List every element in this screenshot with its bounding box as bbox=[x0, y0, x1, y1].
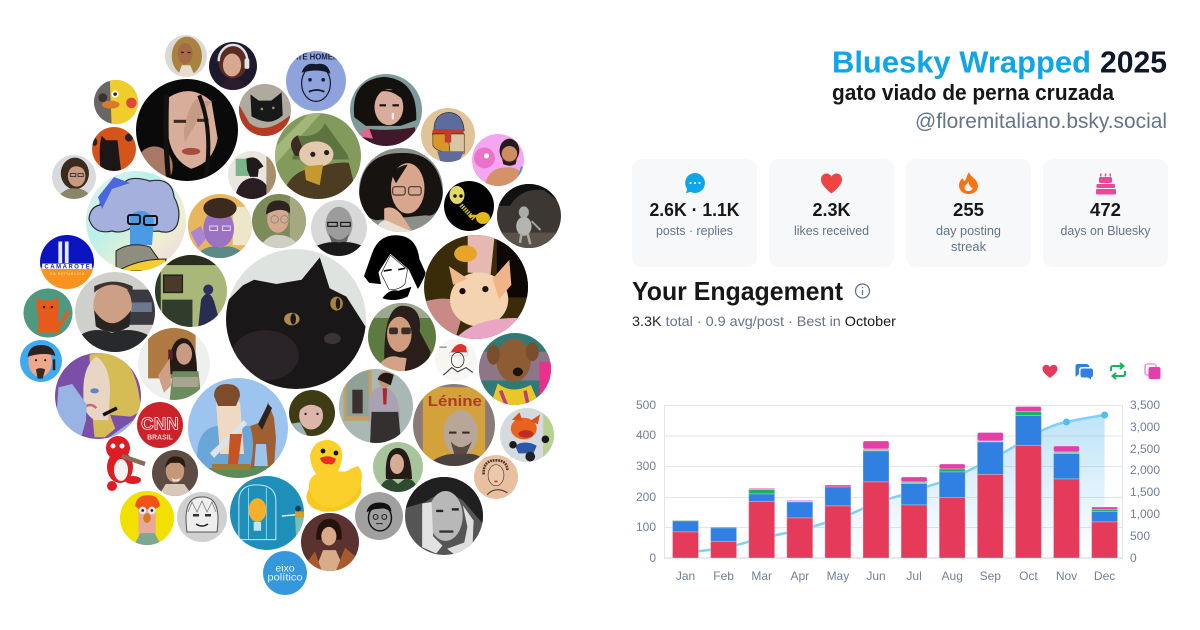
avatar: sketch on peach bbox=[474, 455, 518, 499]
stacked bars: monthly engagement bbox=[672, 406, 1118, 558]
y axis right labels bbox=[1130, 398, 1160, 565]
bar: Feb bbox=[711, 527, 737, 558]
avatar: red plush with bazooka bbox=[106, 436, 145, 491]
avatar: black cat on red blanket bbox=[239, 84, 291, 136]
avatar: grayscale man with hands on face bbox=[405, 477, 483, 555]
avatar: Lenin book cover bbox=[413, 384, 495, 466]
avatar: woman in sunglasses bbox=[368, 303, 436, 371]
avatar: man with purple light bbox=[188, 194, 252, 258]
y axis right labels: 1,500 bbox=[1130, 485, 1160, 499]
bar: May bbox=[825, 485, 851, 558]
avatar bubble cluster bbox=[20, 35, 561, 595]
avatar: woman with headphones bbox=[209, 42, 257, 90]
x axis month labels: Oct bbox=[1019, 569, 1038, 583]
stat card: posts and replies bbox=[632, 159, 757, 267]
icon: reposts arrows bbox=[1111, 363, 1125, 379]
avatar: smiling man in dark room bbox=[152, 450, 198, 496]
avatar: drawn man on periwinkle: ATE HOMEM bbox=[293, 52, 339, 61]
avatar: woman with 80s hair and cigarette bbox=[350, 74, 422, 146]
bar: Dec bbox=[1092, 507, 1118, 558]
title: 2025 bbox=[1100, 44, 1167, 80]
avatar: red cat on green bbox=[24, 288, 72, 338]
icon: birthday cake bbox=[1096, 174, 1116, 194]
y axis right labels: 3,500 bbox=[1130, 398, 1160, 412]
avatar: Lenin book cover: Lénine bbox=[428, 394, 482, 410]
avatar: silhouette with cap bbox=[228, 151, 276, 202]
chart legend bbox=[1042, 363, 1160, 380]
avatar: Eixo Politico logo bbox=[263, 551, 307, 595]
avatar: grey creature in dark room bbox=[497, 184, 561, 248]
x axis month labels: Feb bbox=[713, 569, 734, 583]
stat card: likes received: likes received bbox=[794, 224, 869, 238]
x axis month labels: Jul bbox=[906, 569, 922, 583]
avatar: manga character bbox=[360, 234, 426, 300]
stat card: posts and replies: posts · replies bbox=[656, 224, 733, 238]
x axis month labels: Jan bbox=[676, 569, 695, 583]
y axis right labels: 1,000 bbox=[1130, 507, 1160, 521]
x axis month labels: Sep bbox=[980, 569, 1001, 583]
avatar: blue cartoon with purple cloud hair bbox=[86, 171, 186, 271]
x axis month labels: Jun bbox=[866, 569, 886, 583]
stat card: days on Bluesky: 472 bbox=[1090, 199, 1121, 220]
x axis month labels: Mar bbox=[751, 569, 772, 583]
title: Bluesky Wrapped bbox=[832, 44, 1091, 80]
avatar: orange fluffy with black cat bbox=[92, 127, 136, 171]
icon: replies bubbles bbox=[1076, 364, 1093, 380]
avatar: cartoon man on light blue bbox=[20, 340, 62, 382]
bar: Jul bbox=[901, 477, 927, 558]
y axis right labels: 2,000 bbox=[1130, 463, 1160, 477]
combined bar and line chart bbox=[636, 398, 1160, 583]
cumulative line bbox=[686, 412, 1108, 553]
avatar: drawn man on periwinkle bbox=[286, 51, 346, 111]
avatar: CNN Brasil logo bbox=[137, 402, 183, 448]
avatar: yellow duck costume bbox=[94, 80, 138, 124]
avatar: classical painted woman bbox=[301, 513, 359, 571]
avatar: orange bandicoot plush bbox=[500, 408, 554, 462]
y axis right labels: 3,000 bbox=[1130, 420, 1160, 434]
avatar: selfie in green tank top bbox=[138, 328, 210, 400]
icon: quotes copy bbox=[1145, 364, 1160, 379]
icon: likes heart bbox=[1042, 365, 1058, 378]
avatar: CNN Brasil logo: CNN bbox=[141, 414, 179, 434]
handle: @floremitaliano.bsky.social bbox=[915, 110, 1167, 133]
x axis month labels bbox=[676, 569, 1115, 583]
avatar: cubist mask painting bbox=[421, 108, 475, 162]
icon: chat bubble bbox=[685, 173, 705, 193]
display name: gato viado de perna cruzada bbox=[832, 80, 1115, 105]
avatar: green hat character bbox=[275, 113, 361, 199]
avatar: yellow skeleton with trumpet bbox=[444, 181, 494, 231]
engagement summary: 3.3K total · 0.9 avg/post · Best in October bbox=[632, 313, 896, 329]
stat card: likes received: 2.3K bbox=[812, 199, 851, 220]
avatar: yellow rubber duck bbox=[302, 440, 366, 517]
y axis left labels: 500 bbox=[636, 398, 656, 412]
stat card: day posting streak: day posting bbox=[936, 224, 1001, 238]
x axis month labels: Apr bbox=[790, 569, 809, 583]
bar: Aug bbox=[939, 464, 965, 558]
icon: flame bbox=[959, 172, 978, 194]
avatar: Eixo Politico logo: eixo bbox=[275, 563, 295, 575]
avatar: cartoon man with bird on pink bbox=[472, 134, 525, 186]
avatar: Alice-style blonde illustration bbox=[55, 352, 141, 439]
avatar: woman with long black braids bbox=[136, 79, 238, 187]
avatar: lightbulb in birdcage bbox=[230, 476, 304, 550]
stat card: day posting streak: 255 bbox=[953, 199, 984, 220]
x axis month labels: Nov bbox=[1056, 569, 1077, 583]
avatar: Camarote da Republica logo bbox=[40, 235, 94, 289]
y axis right labels: 0 bbox=[1130, 551, 1137, 565]
avatar: doodle on grey bbox=[355, 492, 403, 540]
bar: Jun bbox=[863, 441, 889, 558]
stat card: day posting streak: streak bbox=[951, 240, 987, 254]
avatar: large black cat close-up bbox=[226, 249, 366, 389]
y axis left labels: 400 bbox=[636, 428, 656, 442]
stat card: day posting streak bbox=[906, 159, 1031, 267]
avatar: orange-haired puppet on yellow bbox=[120, 491, 174, 545]
bar: Nov bbox=[1054, 446, 1080, 558]
icon: heart bbox=[821, 174, 842, 194]
stat card: days on Bluesky bbox=[1043, 159, 1168, 267]
y axis right labels: 500 bbox=[1130, 529, 1150, 543]
y axis left labels: 300 bbox=[636, 459, 656, 473]
section heading: Your Engagement: Your Engagement bbox=[632, 276, 843, 306]
avatar: woman in green top bbox=[373, 442, 423, 492]
avatar: Camarote da Republica logo: CAMAROTE bbox=[44, 264, 90, 270]
avatar: CNN Brasil logo: BRASIL bbox=[147, 434, 173, 441]
avatar: blonde singer bbox=[165, 35, 207, 77]
avatar: hamster with sparkle crown bbox=[424, 235, 528, 339]
stat card: posts and replies: 2.6K · 1.1K bbox=[650, 199, 740, 220]
bar: Sep bbox=[977, 432, 1003, 558]
y axis right labels: 2,500 bbox=[1130, 442, 1160, 456]
bar: Mar bbox=[749, 488, 775, 558]
avatar: woman with glasses and bangs bbox=[52, 155, 96, 199]
x axis month labels: May bbox=[827, 569, 849, 583]
bar: Oct bbox=[1015, 406, 1041, 558]
avatar: Eixo Politico logo: político bbox=[267, 571, 303, 583]
y axis left labels: 0 bbox=[649, 551, 656, 565]
avatar: brown puppet in colorful shirt bbox=[479, 333, 551, 405]
avatar: young man with round glasses bbox=[252, 194, 306, 248]
avatar: bald man grayscale bbox=[311, 200, 367, 256]
avatar: manga girl sketch bbox=[177, 492, 227, 542]
y axis left labels: 100 bbox=[636, 520, 656, 534]
stat card: likes received bbox=[769, 159, 894, 267]
avatar: Camarote da Republica logo: DA REPÚBLICA bbox=[50, 271, 85, 276]
avatar: sketch with Santa hat bbox=[435, 339, 477, 381]
x axis month labels: Dec bbox=[1094, 569, 1115, 583]
avatar: painting of green room bbox=[155, 255, 227, 327]
avatar: young person with short hair bbox=[289, 390, 335, 436]
avatar: man with beard and bookshelf bbox=[75, 272, 155, 352]
icon: info bbox=[856, 284, 870, 298]
x axis month labels: Aug bbox=[942, 569, 963, 583]
avatar: weasel with sword and horse bbox=[188, 378, 288, 478]
bar: Apr bbox=[787, 500, 813, 558]
y axis left labels: 200 bbox=[636, 490, 656, 504]
cumulative area bbox=[686, 415, 1105, 558]
y axis left labels bbox=[636, 398, 656, 565]
bar: Jan bbox=[672, 520, 698, 558]
stat card: days on Bluesky: days on Bluesky bbox=[1060, 224, 1151, 238]
avatar: person in suit with mirror bbox=[339, 369, 413, 443]
avatar: woman with curly black hair and glasses bbox=[359, 148, 443, 232]
